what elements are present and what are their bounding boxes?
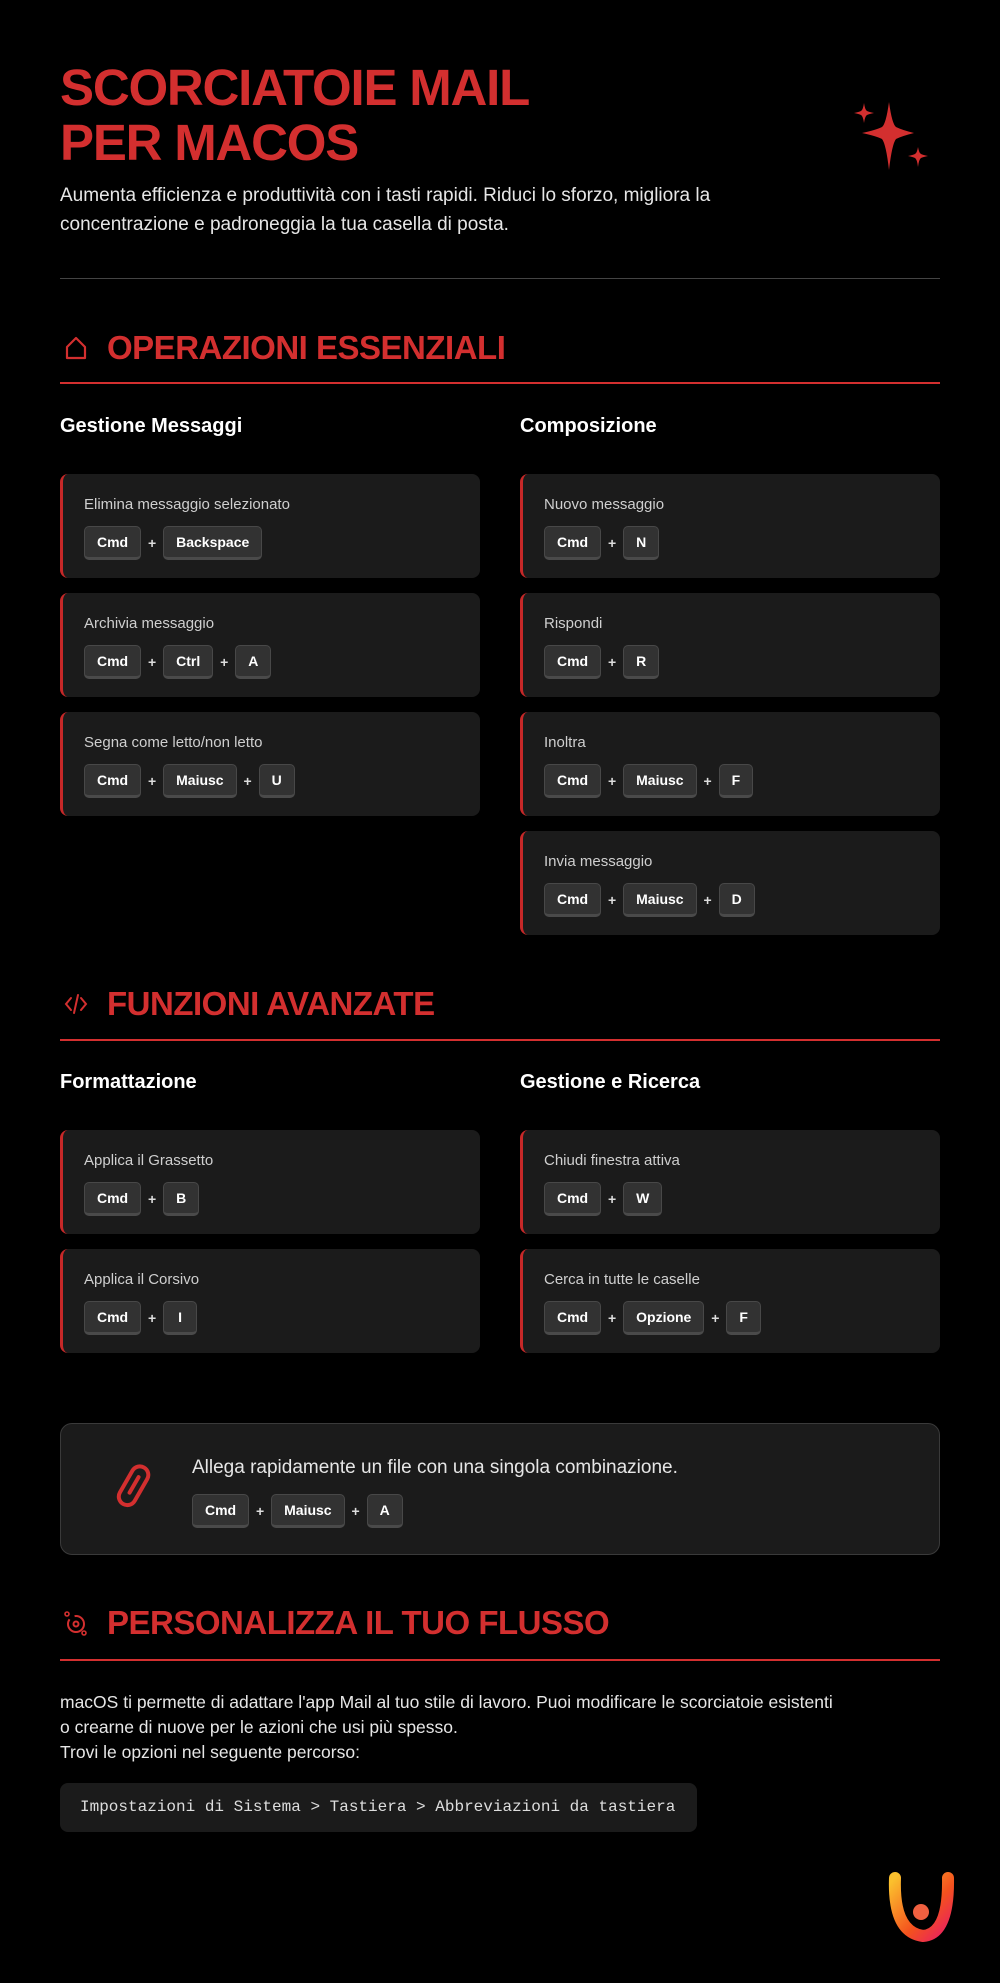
title bbox=[60, 59, 529, 171]
paragraph: macOS ti permette di adattare l'app Mail al tuo stile di lavoro. Puoi modificare le scorciatoie esistenti bbox=[60, 1692, 833, 1712]
card: chiudi: + bbox=[608, 1191, 616, 1207]
card: archivia: + bbox=[148, 654, 156, 670]
paragraph bbox=[60, 1692, 833, 1762]
card: corsivo: + bbox=[148, 1310, 156, 1326]
card: cerca: + bbox=[608, 1310, 616, 1326]
card: segna letto: Maiusc bbox=[176, 772, 224, 788]
card: cerca: Cerca in tutte le caselle bbox=[544, 1271, 700, 1288]
code path bbox=[60, 1783, 697, 1832]
card: segna letto bbox=[60, 712, 480, 816]
card: rispondi: R bbox=[636, 653, 646, 669]
card: archivia: A bbox=[248, 653, 258, 669]
callout keys: + bbox=[256, 1503, 264, 1519]
card: grassetto bbox=[60, 1130, 480, 1234]
card: corsivo: Applica il Corsivo bbox=[84, 1271, 199, 1288]
title: SCORCIATOIE MAIL bbox=[60, 59, 529, 116]
card: elimina: + bbox=[148, 535, 156, 551]
icon: code bbox=[64, 994, 88, 1014]
card: inoltra: F bbox=[732, 772, 740, 788]
card: archivia bbox=[60, 593, 480, 697]
card: invia: + bbox=[704, 892, 712, 908]
card: nuovo: N bbox=[636, 534, 646, 550]
card: inoltra: + bbox=[704, 773, 712, 789]
callout keys: Maiusc bbox=[284, 1502, 332, 1518]
card: rispondi: Cmd bbox=[557, 653, 588, 669]
card: invia: D bbox=[732, 891, 742, 907]
card: rispondi bbox=[520, 593, 940, 697]
callout keys: A bbox=[380, 1502, 390, 1518]
card: archivia: Archivia messaggio bbox=[84, 615, 214, 632]
icon: sparkles bbox=[854, 102, 928, 170]
card: inoltra: Maiusc bbox=[636, 772, 684, 788]
card: grassetto: Cmd bbox=[97, 1190, 128, 1206]
subheading: formattazione: Formattazione bbox=[60, 1071, 197, 1093]
card: grassetto: + bbox=[148, 1191, 156, 1207]
card: elimina: Elimina messaggio selezionato bbox=[84, 496, 290, 513]
card: cerca: Cmd bbox=[557, 1309, 588, 1325]
card: nuovo bbox=[520, 474, 940, 578]
subheading: gestione e ricerca: Gestione e Ricerca bbox=[520, 1071, 700, 1093]
subheading: composizione: Composizione bbox=[520, 415, 657, 437]
paragraph: o crearne di nuove per le azioni che usi più spesso. bbox=[60, 1717, 458, 1737]
card: rispondi: + bbox=[608, 654, 616, 670]
card: invia bbox=[520, 831, 940, 935]
card: segna letto: Segna come letto/non letto bbox=[84, 734, 262, 751]
callout: allega bbox=[60, 1423, 940, 1555]
title: PER MACOS bbox=[60, 114, 358, 171]
paragraph: Trovi le opzioni nel seguente percorso: bbox=[60, 1742, 360, 1762]
card: nuovo: Cmd bbox=[557, 534, 588, 550]
callout keys: Cmd bbox=[205, 1502, 236, 1518]
card: chiudi bbox=[520, 1130, 940, 1234]
card: segna letto: + bbox=[244, 773, 252, 789]
card: chiudi: W bbox=[636, 1190, 649, 1206]
logo bbox=[888, 1872, 954, 1942]
card: archivia: Cmd bbox=[97, 653, 128, 669]
card: inoltra bbox=[520, 712, 940, 816]
subheading: gestione messaggi: Gestione Messaggi bbox=[60, 415, 242, 437]
card: segna letto: + bbox=[148, 773, 156, 789]
card: invia: + bbox=[608, 892, 616, 908]
card: grassetto: Applica il Grassetto bbox=[84, 1152, 213, 1169]
card: grassetto: B bbox=[176, 1190, 186, 1206]
card: nuovo: + bbox=[608, 535, 616, 551]
card: archivia: + bbox=[220, 654, 228, 670]
card: inoltra: + bbox=[608, 773, 616, 789]
icon: workflow bbox=[64, 1611, 87, 1636]
card: segna letto: U bbox=[272, 772, 282, 788]
card: inoltra: Inoltra bbox=[544, 734, 586, 751]
card: invia: Invia messaggio bbox=[544, 853, 652, 870]
card: invia: Cmd bbox=[557, 891, 588, 907]
card: chiudi: Cmd bbox=[557, 1190, 588, 1206]
card: segna letto: Cmd bbox=[97, 772, 128, 788]
card: inoltra: Cmd bbox=[557, 772, 588, 788]
card: archivia: Ctrl bbox=[176, 653, 200, 669]
card: corsivo bbox=[60, 1249, 480, 1353]
card: cerca: + bbox=[711, 1310, 719, 1326]
card: corsivo: I bbox=[178, 1309, 182, 1325]
card: cerca: F bbox=[739, 1309, 748, 1325]
card: rispondi: Rispondi bbox=[544, 615, 602, 632]
icon: paperclip bbox=[116, 1464, 150, 1508]
callout keys: + bbox=[352, 1503, 360, 1519]
card: elimina: Cmd bbox=[97, 534, 128, 550]
card: invia: Maiusc bbox=[636, 891, 684, 907]
card: corsivo: Cmd bbox=[97, 1309, 128, 1325]
card: cerca bbox=[520, 1249, 940, 1353]
callout keys bbox=[192, 1494, 403, 1528]
subtitle: Aumenta efficienza e produttività con i tasti rapidi. Riduci lo sforzo, migliora la concentrazione e padroneggia la tua casella di posta. bbox=[60, 185, 710, 235]
card: elimina bbox=[60, 474, 480, 578]
code path: Impostazioni di Sistema > Tastiera > Abbreviazioni da tastiera bbox=[80, 1798, 675, 1816]
heading: operazioni essenziali: OPERAZIONI ESSENZIALI bbox=[107, 329, 505, 366]
callout text: Allega rapidamente un file con una singola combinazione. bbox=[192, 1457, 678, 1478]
card: cerca: Opzione bbox=[636, 1309, 691, 1325]
icon: home bbox=[66, 336, 86, 360]
heading: funzioni avanzate: FUNZIONI AVANZATE bbox=[107, 985, 435, 1022]
card: chiudi: Chiudi finestra attiva bbox=[544, 1152, 680, 1169]
heading: personalizza: PERSONALIZZA IL TUO FLUSSO bbox=[107, 1604, 609, 1641]
card: nuovo: Nuovo messaggio bbox=[544, 496, 664, 513]
card: elimina: Backspace bbox=[176, 534, 249, 550]
